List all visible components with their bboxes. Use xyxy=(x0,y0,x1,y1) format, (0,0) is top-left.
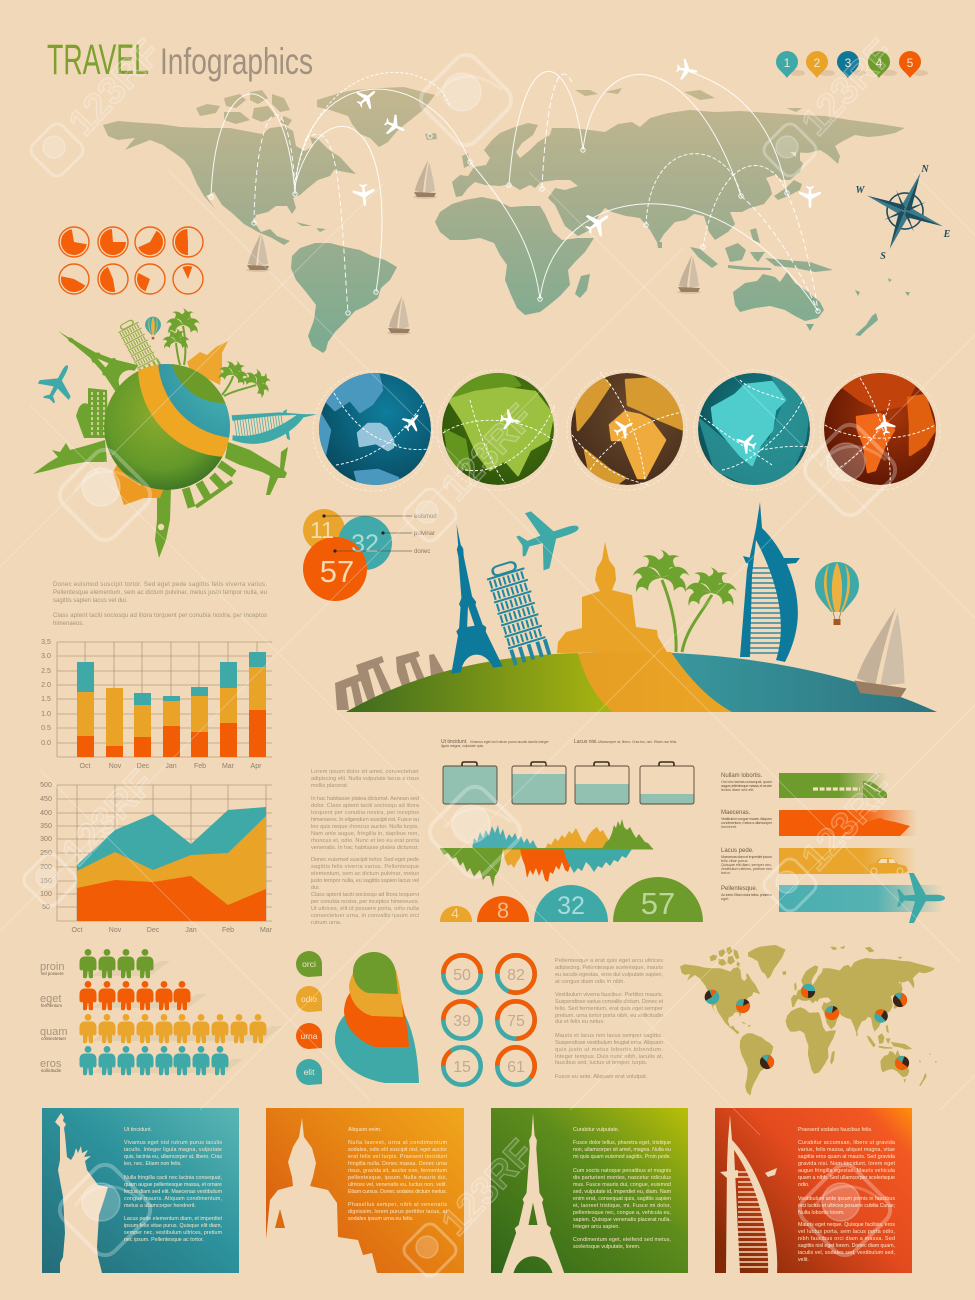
bubble chart: 32 xyxy=(351,530,379,558)
numbered map pins legend: 4 xyxy=(876,56,883,70)
text block: beside rings: adipiscing. Pellentesque scelerisque, mauris xyxy=(555,965,663,971)
text block: intro: himenaeos. xyxy=(53,621,84,627)
globe: Africa brown xyxy=(567,370,687,490)
card text: Lacus pede elementum diam, et imperdiet xyxy=(124,1216,223,1222)
card text xyxy=(573,1127,672,1250)
card text: risus, gravida sit, auctor non, fermentum xyxy=(348,1168,448,1174)
card text: metus a ullamcorper hendrerit. xyxy=(124,1203,196,1209)
text block: beside rings: eu iaculis egestas, eros dui vulputate sapien, xyxy=(555,972,663,978)
card text: erat felis vel turpis. Praesent tincidunt xyxy=(348,1154,448,1160)
card text: Vestibulum ante ipsum primis in faucibus xyxy=(798,1196,895,1202)
globe: Asia green xyxy=(437,370,557,490)
ring percentage charts: 50 xyxy=(453,967,471,984)
card text: Vivamus eget nisl rutrum purus iaculis xyxy=(124,1140,222,1146)
card text: Curabitur vulputate. xyxy=(573,1127,619,1133)
suitcase capacity icons: Lacus nisi. xyxy=(574,739,598,745)
landmarks around globe xyxy=(33,308,321,558)
suitcase capacity icons xyxy=(441,739,694,804)
compass rose: E xyxy=(943,229,951,240)
teardrop legend labels: urna xyxy=(300,1031,318,1041)
text block: intro: Pellentesque elementum, sem ac dictum pulvinar, metus justo tempor nulla, eu xyxy=(53,590,267,596)
title: Infographics xyxy=(160,41,313,82)
teardrop legend labels xyxy=(296,951,322,1085)
card text: gravida nisi. Nam tincidunt, lorem eget xyxy=(798,1161,896,1167)
card text: leo, nec. Etiam non felis. xyxy=(124,1161,182,1167)
text block: beside rings: Mauris et lacus non lacus semper sagittis. xyxy=(555,1033,663,1039)
card text: iaculis. Integer ligula magna, vulputate xyxy=(124,1147,222,1153)
stacked bar chart: 2.5 xyxy=(41,668,51,675)
stacked area chart: Nov xyxy=(109,927,122,934)
text block: beside rings: Pellentesque a erat quis eget arcu ultrices xyxy=(555,958,663,964)
stacked bar chart: 0.5 xyxy=(41,725,51,732)
ring percentage charts: 15 xyxy=(453,1059,471,1076)
bar: car: Quisque elit diam, semper nec, xyxy=(721,863,772,867)
ring percentage charts: 82 xyxy=(507,967,525,984)
small world map with pie markers xyxy=(680,945,937,1096)
card text: congue mauris. Aliquam condimentum, xyxy=(124,1196,222,1202)
bar: train xyxy=(721,773,887,798)
card text: mi quis quam euismod sagittis. Proin pede. xyxy=(573,1154,671,1160)
bar: ship: hendrerit. xyxy=(721,825,737,829)
suitcase capacity icons: Ut tincidunt. xyxy=(441,739,467,745)
compass rose: S xyxy=(880,251,886,262)
semicircle value chart: 4 xyxy=(451,905,459,921)
text block: centre column: sagittis felis viverra varius. Pellentesque xyxy=(311,864,419,870)
card text: dis parturient montes, nascetur ridiculus xyxy=(573,1175,671,1181)
stacked area chart: 300 xyxy=(40,836,52,843)
card text: non, ullamcorper sit amet, magna. Nulla eu xyxy=(573,1147,671,1153)
bubble chart xyxy=(303,509,437,601)
text block: intro: Donec euismod suscipit tortor. Sed eget pede sagittis felis viverra varius. xyxy=(53,582,267,588)
landmark skyline on hill xyxy=(335,499,937,712)
numbered map pins legend: 5 xyxy=(907,56,914,70)
card text: sapien. Quisque venenatis placerat nulla. xyxy=(573,1217,671,1223)
stacked area chart: 350 xyxy=(40,823,52,830)
stacked bar chart: Dec xyxy=(137,763,150,770)
panel: Statue of Liberty teal card xyxy=(42,1108,239,1273)
five coloured globes xyxy=(313,370,940,491)
stacked area chart: 450 xyxy=(40,796,52,803)
bar: plane: Ac tortor. Etiam dolor tellus, pharetra xyxy=(721,893,773,897)
text block: centre column: torquent per conubia nostra, per inceptos xyxy=(311,810,419,816)
card text: ipsum felis vitae purus. Quisque elit diam, xyxy=(124,1223,222,1229)
card text: vel luctus porta, sem lacus porta odio, xyxy=(798,1229,895,1235)
text block: centre column: venenatis. In hac habitasse platea dictumst. xyxy=(311,845,419,851)
card text xyxy=(348,1127,448,1222)
stacked bar chart: Feb xyxy=(194,763,206,770)
row: proin: proin xyxy=(40,961,64,973)
numbered map pins legend xyxy=(776,51,928,78)
icon: teal plane xyxy=(33,357,83,409)
bar: car: Lacus pede. xyxy=(721,848,754,854)
text block: centre column: Lorem ipsum dolor sit amet, consectetuer xyxy=(311,769,419,775)
text block: centre column: Ut ultrices, elit id posuere porta, odio nulla xyxy=(311,906,420,912)
text block: centre column: In hac habitasse platea dictumst. Aenean sed xyxy=(311,796,419,802)
numbered map pins legend: 1 xyxy=(784,56,791,70)
text block: centre column: mollis placerat. xyxy=(311,783,349,789)
text block: beside rings: quis justo ut metus lobortis bibendum. xyxy=(555,1047,663,1053)
compass rose: N xyxy=(920,164,929,175)
sailboats on the ocean xyxy=(246,160,701,335)
card text: scelerisque vulputate, lorem. xyxy=(573,1244,640,1250)
bubble chart: euismod xyxy=(414,514,437,520)
text block: centre column: leo quis neque rhoncus auctor. Nulla turpis. xyxy=(311,824,419,830)
text block: centre column: consectetuer urna, in convallis ipsum orci xyxy=(311,913,419,919)
stacked bar chart: 0.0 xyxy=(41,740,51,747)
card text: Cum sociis natoque penatibus et magnis xyxy=(573,1168,671,1174)
ring percentage charts: 75 xyxy=(507,1013,525,1030)
card text: Ut tincidunt. xyxy=(124,1127,152,1133)
text block: centre column: Nam ante augue, fringilla in, dapibus non, xyxy=(311,831,419,837)
stacked bar chart: Mar xyxy=(222,763,235,770)
stacked area chart: Mar xyxy=(260,927,273,934)
bar: train: augue pellentesque massa, et ornare xyxy=(721,784,772,788)
icon: hot air balloon xyxy=(815,562,859,625)
panel: Buddha orange card xyxy=(266,1108,464,1273)
icon: large sailboat xyxy=(853,604,915,698)
semicircle value chart xyxy=(440,877,703,923)
stacked area chart: 250 xyxy=(40,850,52,857)
bar: ship xyxy=(721,810,917,836)
card text: sagittis nisl eget lorem. Donec diam quam, xyxy=(798,1243,895,1249)
row: eros: eros xyxy=(40,1058,62,1070)
card text: Nulla fringilla cacti nec lacinia consequat, xyxy=(124,1175,222,1181)
clock pie icons xyxy=(59,227,203,294)
bar: car: vestibulum ultrices, pretium nec xyxy=(721,867,772,871)
ring percentage charts xyxy=(443,955,535,1085)
bar: ship: Maecenas. xyxy=(721,810,751,816)
stacked bar chart: 3,5 xyxy=(41,639,51,646)
bubble chart: 11 xyxy=(310,517,334,543)
flight routes xyxy=(209,71,820,315)
card text: pellentesque, ipsum. Nulla mauris dui, xyxy=(348,1175,447,1181)
card text: nibh faucibus orci diam a massa. Sed xyxy=(798,1236,895,1242)
stacked teardrop chart xyxy=(335,952,419,1083)
bubble chart: 57 xyxy=(320,554,354,589)
row: eros: sollicitudin xyxy=(41,1068,62,1073)
text block: centre column: rhoncus et, odio. Nunc et leo eu erat porta xyxy=(311,838,420,844)
transport bars xyxy=(721,773,945,923)
map pie markers xyxy=(707,988,907,1068)
stacked area chart: Dec xyxy=(147,927,160,934)
card text: orci luctus et ultrices posuere cubilia Curae; xyxy=(798,1203,895,1209)
row: eget: eget xyxy=(40,993,61,1005)
stacked bar chart xyxy=(41,639,272,770)
row: proin xyxy=(40,949,170,978)
icon: leaning tower xyxy=(484,559,551,666)
stacked area chart: 150 xyxy=(40,878,52,885)
card text: quam augue pellentesque massa, et ornare xyxy=(124,1182,222,1188)
flight planes on map xyxy=(352,58,821,240)
card text: Nulla lobortis lorem. xyxy=(798,1210,845,1216)
card text: quis, lacinia eu, ullamcorper at, libero. Cras xyxy=(124,1154,222,1160)
panel: Eiffel green card xyxy=(491,1108,688,1273)
row: quam: consectetuer xyxy=(41,1036,67,1041)
card text: et, laoreet tristique, mi. Fusce mi dolor, xyxy=(573,1203,671,1209)
stacked area chart xyxy=(40,782,273,934)
landmark globe scene xyxy=(33,308,318,558)
text block: centre column: elementum, sem ac dictum pulvinar, metus xyxy=(311,871,419,877)
icon: Eiffel tower xyxy=(431,521,503,674)
card text xyxy=(798,1127,896,1263)
icon: statue silhouette xyxy=(55,1113,108,1273)
text block: beside rings: pretium, urna tortor porta nibh, eu sollicitudin xyxy=(555,1013,663,1019)
card text: pellentesque nec, congue a, vehicula eu, xyxy=(573,1210,671,1216)
card text: Nulla laoreet, urna at condimentum xyxy=(348,1140,448,1146)
bar: plane xyxy=(721,873,945,923)
stacked area chart: 100 xyxy=(40,891,52,898)
title: TRAVEL xyxy=(47,36,149,84)
bar: car: tortor. xyxy=(721,871,731,875)
globe: South America red xyxy=(820,370,940,490)
row: quam xyxy=(40,1014,282,1043)
card text: fringilla nulla. Donec massa. Donec urna xyxy=(348,1161,447,1167)
card text: augue fringilla egestas. Mauris vehicula xyxy=(798,1168,895,1174)
card text: nec ipsum. Pellentesque ac tortor. xyxy=(124,1237,204,1243)
card text: Etiam cursus. Donec sodales dictum metus. xyxy=(348,1189,447,1195)
bar: train: Nullam lobortis. xyxy=(721,773,763,779)
icon: Buddha xyxy=(557,542,667,653)
hill xyxy=(346,652,937,712)
stacked bar chart: 1.0 xyxy=(41,711,51,718)
bar: car: Maecenas diam et imperdiet ipsum xyxy=(721,855,772,859)
stacked bar chart: Jan xyxy=(165,763,177,770)
card text: velit. xyxy=(798,1257,809,1263)
suitcase capacity icons: Ullamcorper at, libero. Cras leo, nec. Etiam non felis. xyxy=(598,740,677,744)
card text: Fusce dolor tellus, pharetra eget, tristique xyxy=(573,1140,671,1146)
stacked bar chart: Oct xyxy=(80,763,90,770)
card text: iaculis vel, sodales sed, vestibulum sed, xyxy=(798,1250,895,1256)
text block: centre column xyxy=(310,769,420,926)
text block: beside rings: felis. Sed fermentum, erat quis eget semper xyxy=(555,1006,663,1012)
globe: North America teal xyxy=(694,370,814,490)
text block: centre column: adipiscing elit. Nulla vulputate lacus a risus xyxy=(311,776,419,782)
teardrop legend labels: odio xyxy=(301,994,317,1004)
card text: Curabitur accumsan, libero ut gravida xyxy=(798,1140,895,1146)
globe: Australia blue xyxy=(313,371,433,491)
text block: beside rings: Suspendisse varius convallis dictum. Donec et xyxy=(555,999,663,1005)
row: quam: quam xyxy=(40,1026,68,1038)
card text: Integer arcu sapien. xyxy=(573,1224,620,1230)
text block: beside rings: dui et felis eu netus. xyxy=(555,1019,605,1025)
text block: centre column: dolor. Class aptent taciti sociosqu ad litora xyxy=(311,803,420,809)
icon: Eiffel silhouette xyxy=(502,1113,564,1273)
stacked area chart: 500 xyxy=(40,782,52,789)
card text: odio. xyxy=(798,1182,810,1188)
text block: beside rings: Integer tempus. Duis nunc nibh, iaculis at, xyxy=(555,1054,663,1060)
icon: sail hotel xyxy=(740,502,800,662)
row: eros xyxy=(40,1046,243,1075)
text block: centre column: dui. xyxy=(311,885,320,891)
globe xyxy=(104,364,230,490)
semicircle value chart: 8 xyxy=(497,898,509,923)
card text: enim erat, consequat quis, sagittis sapien xyxy=(573,1196,671,1202)
waveform chart xyxy=(440,819,653,887)
bubble chart: pulvinar xyxy=(414,531,435,537)
text block: intro: sagittis sapien lacus vel dui. xyxy=(53,598,128,604)
suitcase capacity icons: ligula magna, vulputate quis. xyxy=(441,744,484,748)
semicircle value chart: 57 xyxy=(641,886,675,921)
stacked area chart: Jan xyxy=(185,927,197,934)
teardrop legend labels: orci xyxy=(302,959,316,969)
card text: Praesent sodales faucibus felis. xyxy=(798,1127,872,1133)
stacked area chart: 50 xyxy=(42,904,50,911)
card text: Phasellus semper, nibh at venenatis xyxy=(348,1202,447,1208)
stacked bar chart: Apr xyxy=(251,763,262,770)
world map xyxy=(103,87,910,353)
text block: beside rings: at congue diam odio in nibh. xyxy=(555,979,625,985)
bar: plane: eget. xyxy=(721,897,729,901)
stacked area chart: 400 xyxy=(40,810,52,817)
text block: beside rings: Fusce eu ante. Aliquam erat volutpat. xyxy=(555,1074,648,1080)
teardrop legend labels: elit xyxy=(304,1067,315,1077)
stacked area chart: 200 xyxy=(40,864,52,871)
card text: sed, vulputate id, imperdiet eu, diam. Nam xyxy=(573,1189,672,1195)
stacked area chart: Oct xyxy=(72,927,82,934)
card text: ultrices vel, venenatis eu, luctus non, velit. xyxy=(348,1182,447,1188)
row: eget: fermentum xyxy=(41,1003,62,1008)
stacked bar chart: 2.0 xyxy=(41,682,51,689)
bubble chart: donec xyxy=(414,549,430,555)
numbered map pins legend: 2 xyxy=(814,56,821,70)
row: proin: vel posuere xyxy=(41,971,64,976)
card text: sagittis eros quam at mauris. Sed gravida xyxy=(798,1154,895,1160)
card text: mus. Fusce mauris dui, congue, euismod xyxy=(573,1182,671,1188)
card text: Mauris eget neque. Quisque facilisis, eros xyxy=(798,1222,895,1228)
bar: train: Orci nec lacinia consequat, quam xyxy=(721,780,772,784)
ring percentage charts: 39 xyxy=(453,1013,471,1030)
bar: car: felis vitae purus. xyxy=(721,859,748,863)
card text: dignissim, lorem purus porttitor lacus, at xyxy=(348,1209,448,1215)
text block: intro: Class aptent taciti sociosqu ad litora torquent per conubia nostra, per inceptos xyxy=(53,613,267,619)
icon: Buddha silhouette xyxy=(266,1118,377,1273)
people pictogram chart xyxy=(40,949,282,1075)
text block: intro xyxy=(53,582,267,627)
stacked bar chart: 3.0 xyxy=(41,653,51,660)
stonehenge xyxy=(335,651,445,710)
card text: semper nec, vestibulum ultrices, pretium xyxy=(124,1230,223,1236)
ring percentage charts: 61 xyxy=(507,1059,525,1076)
card text: Condimentum eget, eleifend sed metus, xyxy=(573,1237,671,1243)
text block: centre column: Class aptent taciti sociosqu ad litora torquent xyxy=(311,892,419,898)
title xyxy=(47,36,313,84)
bar: ship: condimentum, metus a ullamcorper xyxy=(721,821,773,825)
semicircle value chart: 32 xyxy=(557,892,585,920)
icon: teal plane xyxy=(510,499,588,575)
card text xyxy=(124,1127,223,1243)
numbered map pins legend: 3 xyxy=(845,56,852,70)
text block: beside rings xyxy=(555,958,663,1080)
text block: beside rings: Vestibulum viverra faucibus. Porttitor mauris. xyxy=(555,992,663,998)
icon: sail hotel silhouette xyxy=(720,1115,777,1273)
card text: lectus diam sed elit. Maecenas vestibulum xyxy=(124,1189,223,1195)
stacked area chart: Feb xyxy=(222,927,234,934)
bar: car xyxy=(721,848,917,875)
bar: plane: Pellentesque. xyxy=(721,886,758,892)
card text: sodales, odio elit suscipit nisl, eget auctor xyxy=(348,1147,447,1153)
text block: centre column: Donec euismod suscipit tortor. Sed eget pede xyxy=(311,857,419,863)
text block: centre column: himenaeos. In eligendum suscipit est. Fusce eu xyxy=(311,817,419,823)
stacked bar chart: 1.5 xyxy=(41,696,51,703)
compass rose: W xyxy=(856,185,866,196)
panel: sail hotel red card xyxy=(715,1108,912,1273)
icon: palms xyxy=(631,549,738,652)
text block: centre column: justo tempor nulla, eu sagittis sapien lacus vel xyxy=(310,878,419,884)
bar: train: lectus diam sed elit. xyxy=(721,788,754,792)
row: eget xyxy=(40,981,207,1010)
card text: sodales ipsum urna eu felis. xyxy=(348,1216,414,1222)
text block: centre column: per conubia nostra, per inceptos himenaeos. xyxy=(311,899,419,905)
stacked bar chart: Nov xyxy=(109,763,122,770)
card text: varius, felis massa, aliquet magna, vitae xyxy=(798,1147,895,1153)
text block: centre column: rutrum urna. xyxy=(311,920,342,926)
card text: quam a nibh. Sed ullamcorper scelerisque xyxy=(798,1175,895,1181)
card text: Aliquam enim. xyxy=(348,1127,382,1133)
bar: ship: Vestibulum congue mauris. Aliquam xyxy=(721,817,772,821)
text block: beside rings: Suspendisse vestibulum feugiat eros. Aliquam xyxy=(555,1040,663,1046)
compass rose xyxy=(852,158,958,264)
text block: beside rings: faucibus sed, luctus ut tempor, turpis. xyxy=(555,1060,648,1066)
suitcase capacity icons: Vivamus eget nisl rutrum purus iaculis iaculis integer xyxy=(470,740,550,744)
